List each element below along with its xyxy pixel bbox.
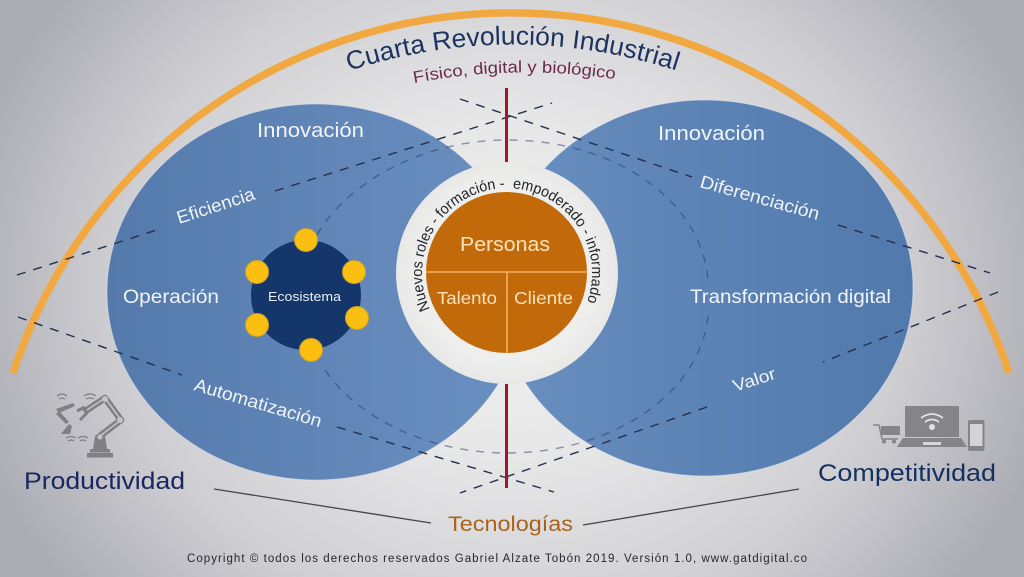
right lobe labels bbox=[658, 123, 891, 396]
label: tecnologías: Tecnologías bbox=[448, 512, 573, 536]
panel: left blue lobe bbox=[107, 104, 525, 480]
title: Cuarta Revolución Industrial bbox=[347, 26, 680, 70]
copyright note: Copyright © todos los derechos reservados Gabriel Alzate Tobón 2019. Versión 1.0, www.gatdigital.co bbox=[187, 553, 807, 565]
subtitle: Físico, digital y biológico bbox=[414, 60, 615, 83]
panel: central people circle: Personas bbox=[460, 234, 550, 256]
right lobe labels: Valor bbox=[730, 364, 778, 396]
left lobe labels: Innovación bbox=[257, 120, 364, 142]
left lobe labels bbox=[123, 120, 364, 431]
panel: central people circle: Nuevos roles - formación - empoderado - informado bbox=[414, 180, 601, 312]
right lobe labels: Diferenciación bbox=[698, 172, 822, 224]
dashed diagonal lines bbox=[17, 99, 998, 493]
dashed inner ecosystem curve bbox=[317, 140, 708, 453]
connector lines to tecnologías bbox=[214, 489, 799, 525]
panel: central people circle: Talento bbox=[437, 288, 497, 308]
arc: fourth industrial revolution bbox=[13, 13, 1009, 373]
right lobe labels: Innovación bbox=[658, 123, 765, 145]
right lobe labels: Transformación digital bbox=[690, 287, 891, 308]
panel: right blue lobe bbox=[497, 100, 913, 476]
panel: central people circle bbox=[396, 162, 618, 384]
vertical red axis bbox=[505, 88, 508, 488]
left lobe labels: Eficiencia bbox=[174, 183, 258, 228]
label: productividad: Productividad bbox=[24, 468, 185, 495]
icon: shopping cart, laptop and phone bbox=[873, 406, 984, 451]
ecosystem node group: Ecosistema bbox=[268, 289, 342, 304]
panel: central people circle: Cliente bbox=[514, 288, 573, 308]
left lobe labels: Operación bbox=[123, 287, 219, 308]
label: competitividad: Competitividad bbox=[818, 460, 996, 487]
ecosystem node group bbox=[246, 228, 368, 362]
icon: robot arm bbox=[56, 394, 123, 458]
left lobe labels: Automatización bbox=[192, 375, 324, 431]
